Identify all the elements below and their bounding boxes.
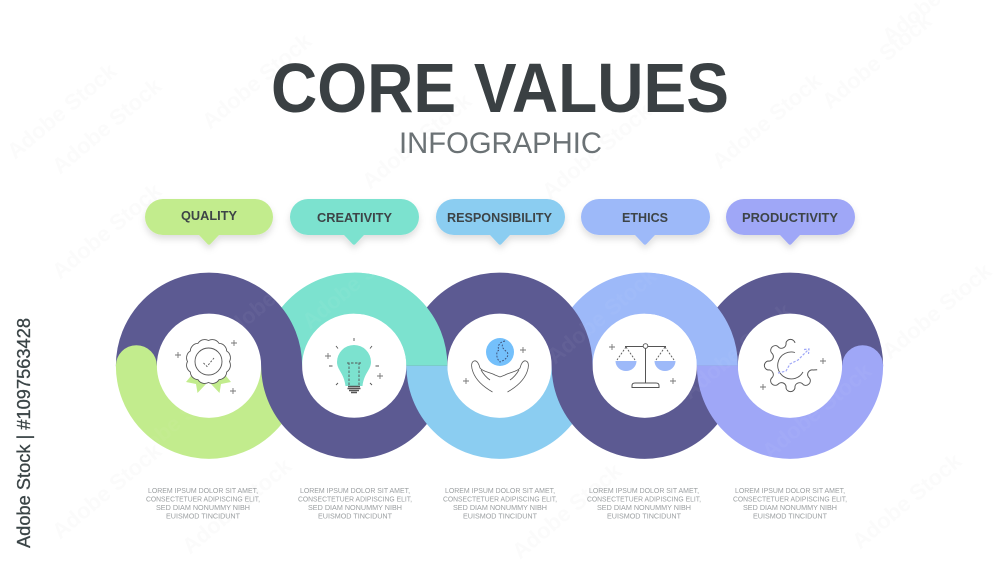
ring 1 rounded end: [116, 345, 157, 386]
background watermark: Adobe Stock: [47, 73, 167, 179]
caption 1: EUISMOD TINCIDUNT: [166, 512, 240, 520]
bulb base: [348, 386, 360, 392]
caption 4: LOREM IPSUM DOLOR SIT AMET,: [589, 486, 699, 495]
caption 1: CONSECTETUER ADIPISCING ELIT,: [146, 494, 260, 504]
pill: productivity: [726, 199, 855, 245]
caption 3: LOREM IPSUM DOLOR SIT AMET,: [445, 486, 555, 495]
caption 5: EUISMOD TINCIDUNT: [753, 512, 827, 520]
caption 4: [587, 486, 701, 520]
background watermark: Adobe Stock: [707, 68, 827, 174]
pill: productivity: PRODUCTIVITY: [742, 211, 839, 225]
gear outline: [760, 335, 822, 396]
watermark over rings: Adobe Stock: [117, 368, 237, 474]
watermark over rings: Adobe Stock: [297, 228, 417, 334]
medal sparkles: [175, 340, 237, 394]
caption 5: CONSECTETUER ADIPISCING ELIT,: [733, 494, 847, 504]
scale sparkles: [609, 344, 676, 384]
bulb glass: [337, 345, 371, 386]
hands: [472, 361, 528, 392]
ring 2 upper: creativity teal: [282, 293, 427, 366]
watermark over rings: Adobe Stock: [542, 263, 662, 369]
caption 3: [443, 486, 557, 520]
caption 5: [733, 486, 847, 520]
bulb sparkles: [325, 353, 383, 379]
ring 5 lower: productivity purple: [717, 366, 863, 438]
pill: responsibility: RESPONSIBILITY: [447, 211, 553, 225]
ring 1 lower: quality green: [136, 366, 282, 438]
icon: balance scale: [609, 344, 676, 388]
icon: gear with arrow: [760, 335, 826, 396]
scale chains: [617, 347, 674, 360]
pill: responsibility: [436, 199, 565, 245]
icon: medal: [175, 340, 237, 394]
caption 5: LOREM IPSUM DOLOR SIT AMET,: [735, 486, 845, 495]
dark ribbon: ring 5 top: [717, 293, 863, 366]
caption 2: EUISMOD TINCIDUNT: [318, 512, 392, 520]
medal seal: [187, 340, 230, 383]
stock id label: Adobe Stock | #1097563428: [13, 318, 34, 548]
caption 4: EUISMOD TINCIDUNT: [607, 512, 681, 520]
background watermark: Adobe Stock: [817, 8, 937, 114]
pill: ethics: [581, 199, 710, 245]
ribbon chain of five rings: [116, 293, 883, 438]
caption 3: SED DIAM NONUMMY NIBH: [453, 503, 547, 512]
dark ribbon: ring 1 top and ring 2 bottom: [136, 293, 427, 438]
bulb rays: [329, 338, 379, 385]
gear growth arrow: [778, 349, 809, 373]
pill: quality: QUALITY: [181, 209, 238, 223]
background watermark: Adobe Stock: [47, 178, 167, 284]
caption 3: CONSECTETUER ADIPISCING ELIT,: [443, 494, 557, 504]
caption 2: CONSECTETUER ADIPISCING ELIT,: [298, 494, 412, 504]
icon: light bulb: [325, 338, 383, 392]
bulb filament: [347, 362, 361, 385]
background watermark: Adobe Stock: [877, 258, 997, 364]
caption texts: [146, 486, 847, 520]
background watermark: Adobe Stock: [177, 453, 297, 559]
caption 4: CONSECTETUER ADIPISCING ELIT,: [587, 494, 701, 504]
globe dashed land: [497, 341, 508, 362]
watermark over rings: Adobe Stock: [212, 243, 332, 349]
medal check mark: [204, 358, 214, 366]
subtitle: INFOGRAPHIC: [399, 127, 602, 160]
caption 4: SED DIAM NONUMMY NIBH: [597, 503, 691, 512]
watermark over rings: [117, 228, 877, 474]
label pills: [145, 199, 855, 245]
scale pans: [616, 361, 676, 371]
ring 5 rounded end: [842, 345, 883, 386]
pill: creativity: CREATIVITY: [317, 211, 393, 225]
caption 1: SED DIAM NONUMMY NIBH: [156, 503, 250, 512]
hands sparkles: [463, 347, 526, 384]
background watermark: Adobe Stock: [507, 458, 627, 563]
scale beam and post: [625, 346, 666, 383]
ring 4 overlap: blue quarter: [645, 293, 717, 366]
scale base: [632, 383, 659, 388]
pill: creativity: [290, 199, 419, 245]
caption 3: EUISMOD TINCIDUNT: [463, 512, 537, 520]
gear inner circle: [778, 352, 803, 379]
background watermark: Adobe Stock: [357, 88, 477, 194]
caption 1: LOREM IPSUM DOLOR SIT AMET,: [148, 486, 258, 495]
caption 2: [298, 486, 412, 520]
caption 2: SED DIAM NONUMMY NIBH: [308, 503, 402, 512]
globe: [486, 338, 514, 366]
background watermark: Adobe Stock: [537, 98, 657, 204]
pill: ethics: ETHICS: [622, 211, 668, 225]
watermark over rings: Adobe Stock: [757, 358, 877, 464]
caption 1: [146, 486, 260, 520]
background watermark: Adobe Stock: [197, 28, 317, 134]
medal ribbons: [186, 376, 231, 393]
icon: hands holding globe: [463, 338, 528, 392]
background watermark: Adobe Stock: [847, 448, 967, 554]
background watermark: Adobe Stock: [2, 58, 122, 164]
ring 2 overlap: teal quarter: [354, 293, 427, 366]
title: CORE VALUES: [271, 49, 729, 127]
ring 4 upper: ethics blue: [572, 293, 717, 366]
ring 3 lower: responsibility sky blue: [427, 366, 572, 438]
caption 2: LOREM IPSUM DOLOR SIT AMET,: [300, 486, 410, 495]
dark ribbon: ring 3 top and ring 4 bottom: [427, 293, 717, 438]
pill: quality: [145, 199, 273, 245]
watermark over rings: Adobe Stock: [677, 298, 797, 404]
background watermark: Adobe Stock: [47, 438, 167, 544]
caption 5: SED DIAM NONUMMY NIBH: [743, 503, 837, 512]
gear sparkles: [760, 358, 826, 390]
